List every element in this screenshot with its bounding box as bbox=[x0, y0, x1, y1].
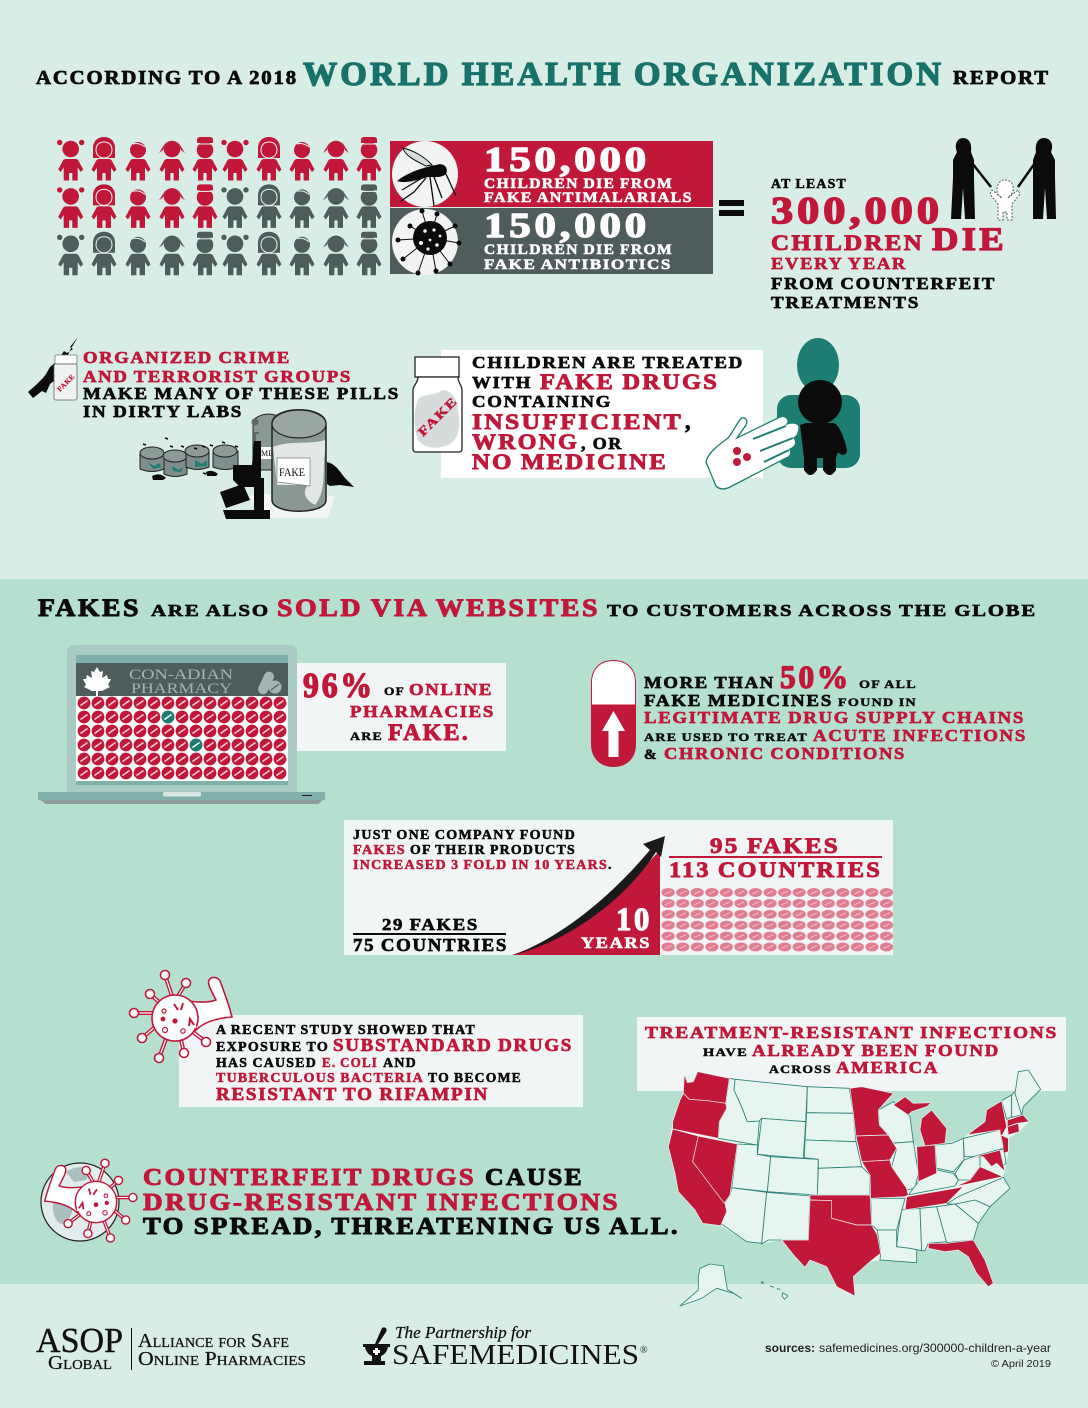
panel: 96 percent: ONLINE bbox=[409, 680, 493, 699]
illustration: dirty lab with jars, microscope and rats: ME bbox=[261, 449, 273, 458]
total: 300,000 children die: AT LEAST bbox=[771, 177, 847, 192]
panel: children treated with fake drugs: NO MEDICINE bbox=[472, 449, 668, 474]
logo: The Partnership for Safe Medicines bbox=[363, 1323, 648, 1371]
icon: bacteria bbox=[392, 208, 462, 276]
chart: growth curve and arrow: YEARS bbox=[581, 935, 651, 952]
icon: capsule with up arrow bbox=[591, 660, 636, 767]
illustration: laptop with fake pharmacy bbox=[38, 645, 325, 804]
heading: sold via websites: FAKES bbox=[38, 595, 141, 622]
title: ACCORDING TO A 2018 bbox=[36, 68, 298, 89]
icon: rifle and fake bottle bbox=[28, 337, 78, 400]
panel: children treated with fake drugs: WRONG bbox=[472, 429, 579, 454]
text: more than 50 percent: MORE THAN bbox=[644, 673, 775, 692]
panel: 96 percent: 96% bbox=[303, 666, 375, 705]
panel: 96 percent: OF bbox=[384, 686, 405, 698]
rat bbox=[327, 462, 354, 487]
panel: organized crime: ORGANIZED CRIME bbox=[83, 348, 291, 367]
logo: ASOP Global: Global bbox=[48, 1352, 112, 1374]
total: 300,000 children die: CHILDREN bbox=[771, 230, 924, 255]
total: 300,000 children die: FROM COUNTERFEIT bbox=[771, 274, 996, 293]
panel: antimalarials: 150,000 bbox=[484, 140, 650, 179]
illustration: laptop with fake pharmacy: CON-ADIAN bbox=[129, 667, 233, 683]
icon: rifle and fake bottle: FAKE bbox=[56, 373, 77, 393]
panel: treatment-resistant infections: ALREADY BEEN FOUND bbox=[752, 1041, 1000, 1060]
panel: organized crime: MAKE MANY OF THESE PILLS bbox=[83, 384, 400, 403]
sources: safemedicines.org/300000-children-a-year bbox=[819, 1341, 1051, 1355]
logo: ASOP Global: Online Pharmacies bbox=[138, 1348, 306, 1370]
equals sign bbox=[719, 200, 744, 216]
logo: The Partnership for Safe Medicines: SAFEMEDICINES bbox=[392, 1339, 639, 1371]
panel: substandard drugs study: RESISTANT TO RIFAMPIN bbox=[216, 1084, 489, 1104]
panel: one company growth chart: . bbox=[608, 858, 613, 873]
panel: one company growth chart: 75 COUNTRIES bbox=[353, 935, 508, 955]
icon: grieving parents and outline of child bbox=[951, 138, 1056, 220]
illustration: dirty lab with jars, microscope and rats: FAKE bbox=[279, 465, 305, 479]
background: footer bbox=[0, 1284, 1088, 1408]
panel: organized crime bbox=[28, 337, 400, 421]
text: more than 50 percent: FOUND IN bbox=[838, 697, 917, 709]
logo: ASOP Global: Alliance for Safe bbox=[138, 1330, 289, 1352]
icon: maple leaf bbox=[83, 667, 111, 696]
pill grid bbox=[661, 887, 893, 952]
panel: treatment-resistant infections: HAVE bbox=[703, 1047, 748, 1059]
panel: children treated with fake drugs: CHILDREN ARE TREATED bbox=[472, 353, 744, 372]
logo: The Partnership for Safe Medicines: ® bbox=[640, 1345, 648, 1356]
panel: children treated with fake drugs: , OR bbox=[581, 434, 623, 453]
total: 300,000 children die: DIE bbox=[932, 222, 1007, 258]
text: more than 50 percent: CHRONIC CONDITIONS bbox=[664, 744, 906, 763]
panel: one company growth chart: 29 FAKES bbox=[382, 915, 479, 934]
panel: antibiotics: CHILDREN DIE FROM bbox=[484, 242, 673, 258]
panel: antimalarials bbox=[390, 140, 713, 207]
panel: organized crime: IN DIRTY LABS bbox=[83, 402, 243, 421]
text: more than 50 percent: FAKE MEDICINES bbox=[644, 691, 833, 710]
panel: 96 percent bbox=[297, 663, 506, 751]
big jar bbox=[272, 410, 326, 511]
hand with pills bbox=[706, 417, 799, 489]
sources: sources: bbox=[765, 1341, 815, 1355]
title: WORLD HEALTH ORGANIZATION bbox=[303, 56, 944, 93]
logo: ASOP Global: ASOP bbox=[36, 1321, 123, 1360]
panel: children treated with fake drugs: CONTAINING bbox=[472, 392, 612, 411]
total: 300,000 children die: TREATMENTS bbox=[771, 293, 920, 312]
panel: substandard drugs study: HAS CAUSED bbox=[216, 1056, 317, 1071]
text: more than 50 percent: LEGITIMATE DRUG SUPPLY CHAINS bbox=[644, 708, 1025, 727]
panel: substandard drugs study: E. COLI bbox=[322, 1056, 378, 1071]
icon: mortar and pestle bbox=[363, 1327, 390, 1365]
illustration: dirty lab with jars, microscope and rats bbox=[140, 410, 354, 519]
closing statement: TO SPREAD, THREATENING US ALL. bbox=[143, 1214, 680, 1240]
text: more than 50 percent: 50% bbox=[780, 660, 851, 696]
heading: sold via websites: TO CUSTOMERS ACROSS THE GLOBE bbox=[607, 601, 1037, 620]
heading: sold via websites: SOLD VIA WEBSITES bbox=[277, 595, 600, 622]
panel: children treated with fake drugs: WITH bbox=[472, 373, 532, 392]
illustration: laptop with fake pharmacy: PHARMACY bbox=[131, 681, 232, 697]
panel: substandard drugs study bbox=[179, 1015, 583, 1107]
panel: substandard drugs study: EXPOSURE TO bbox=[216, 1040, 329, 1055]
closing statement: COUNTERFEIT DRUGS bbox=[143, 1165, 476, 1191]
panel: antibiotics: FAKE ANTIBIOTICS bbox=[484, 257, 672, 273]
text: more than 50 percent: OF ALL bbox=[859, 677, 917, 691]
panel: treatment-resistant infections: ACROSS bbox=[769, 1064, 832, 1076]
panel: 96 percent: PHARMACIES bbox=[350, 702, 495, 721]
chart: growth curve and arrow bbox=[512, 836, 665, 955]
heading: sold via websites bbox=[38, 595, 1037, 622]
icon: mosquito bbox=[392, 141, 458, 207]
title bbox=[36, 56, 1050, 93]
panel: one company growth chart: OF THEIR PRODUCTS bbox=[410, 843, 576, 858]
logo: ASOP Global bbox=[36, 1321, 306, 1374]
panel: antimalarials: FAKE ANTIMALARIALS bbox=[484, 190, 693, 206]
heading: sold via websites: ARE ALSO bbox=[151, 601, 270, 620]
closing statement bbox=[143, 1165, 680, 1240]
panel: one company growth chart bbox=[344, 820, 893, 955]
panel: one company growth chart: 95 FAKES bbox=[710, 833, 840, 858]
text: more than 50 percent: & bbox=[644, 747, 658, 763]
panel: substandard drugs study: AND bbox=[383, 1056, 417, 1071]
small jars bbox=[140, 445, 238, 476]
title: REPORT bbox=[953, 68, 1050, 89]
panel: one company growth chart: 113 COUNTRIES bbox=[669, 857, 882, 882]
total: 300,000 children die: 300,000 bbox=[771, 190, 943, 232]
panel: substandard drugs study: SUBSTANDARD DRUGS bbox=[333, 1035, 573, 1055]
background: lower section bbox=[0, 579, 1088, 1284]
panel: substandard drugs study: TUBERCULOUS BACTERIA bbox=[216, 1071, 424, 1086]
panel: antimalarials: CHILDREN DIE FROM bbox=[484, 176, 673, 192]
panel: one company growth chart: INCREASED 3 FOLD IN 10 YEARS bbox=[353, 858, 608, 873]
panel: 96 percent: ARE bbox=[350, 731, 383, 743]
map: United States with affected states in red bbox=[668, 1070, 1041, 1306]
background: top section bbox=[0, 0, 1088, 579]
icon: globe with muscular bacterium bbox=[41, 1159, 137, 1242]
panel: 96 percent: FAKE. bbox=[388, 720, 470, 745]
icon: parent and child with pills in hand bbox=[706, 338, 860, 489]
microscope bbox=[255, 432, 259, 462]
icon: muscular bacterium bbox=[130, 970, 232, 1062]
text: more than 50 percent: ARE USED TO TREAT bbox=[644, 730, 808, 744]
panel: antibiotics: 150,000 bbox=[484, 206, 650, 245]
logo: The Partnership for Safe Medicines: The Partnership for bbox=[395, 1323, 531, 1342]
chart: growth curve and arrow: 10 bbox=[616, 902, 652, 938]
panel: one company growth chart: FAKES bbox=[353, 843, 406, 858]
panel: antibiotics bbox=[390, 206, 713, 276]
icon: fake bottle: FAKE bbox=[415, 394, 460, 439]
text: more than 50 percent bbox=[644, 660, 1027, 763]
panel: children treated with fake drugs: , bbox=[685, 409, 692, 434]
icon: fake bottle bbox=[413, 357, 462, 452]
back jar bbox=[253, 414, 285, 470]
sources bbox=[765, 1341, 1051, 1370]
icon: pills bbox=[256, 670, 282, 696]
panel: treatment-resistant infections: AMERICA bbox=[836, 1058, 939, 1077]
sources: © April 2019 bbox=[991, 1358, 1051, 1370]
panel: substandard drugs study: TO BECOME bbox=[428, 1071, 522, 1086]
text: more than 50 percent: ACUTE INFECTIONS bbox=[813, 726, 1027, 745]
total: 300,000 children die bbox=[771, 177, 1007, 312]
panel: one company growth chart: JUST ONE COMPANY FOUND bbox=[353, 828, 576, 843]
closing statement: CAUSE bbox=[485, 1165, 584, 1191]
panel: children treated with fake drugs: FAKE DRUGS bbox=[540, 369, 719, 394]
pictogram: thirty children, fifteen red and fifteen grey bbox=[57, 137, 381, 275]
panel: treatment-resistant infections: TREATMENT-RESISTANT INFECTIONS bbox=[645, 1023, 1058, 1042]
panel: children treated with fake drugs bbox=[413, 350, 763, 478]
panel: organized crime: AND TERRORIST GROUPS bbox=[83, 367, 352, 386]
panel: substandard drugs study: A RECENT STUDY SHOWED THAT bbox=[216, 1023, 476, 1038]
panel: treatment-resistant infections bbox=[637, 1017, 1066, 1091]
white powder bbox=[250, 494, 335, 518]
panel: children treated with fake drugs: INSUFFICIENT bbox=[472, 409, 683, 434]
closing statement: DRUG-RESISTANT INFECTIONS bbox=[143, 1190, 620, 1216]
total: 300,000 children die: EVERY YEAR bbox=[771, 254, 907, 273]
